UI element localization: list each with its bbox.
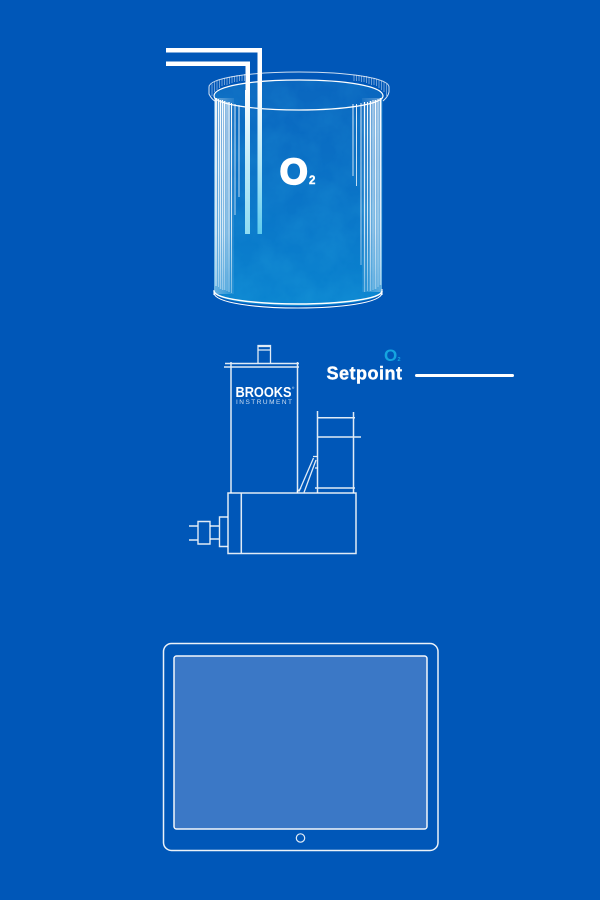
tablet screen (174, 656, 427, 829)
mass flow controller drawing (189, 346, 361, 554)
water texture (214, 80, 383, 306)
O2 small icon: O (384, 346, 397, 365)
brand logo: INSTRUMENT (236, 399, 292, 406)
tablet (164, 644, 438, 850)
outer pipe (166, 48, 262, 90)
O2 label in tank: 2 (309, 175, 315, 187)
tablet body (164, 644, 438, 850)
tank rim (209, 72, 389, 110)
left fitting (189, 522, 210, 544)
brand logo: BROOKS (236, 385, 292, 401)
tank left wall stripes (216, 98, 239, 293)
top stub (258, 346, 270, 363)
tank (209, 72, 389, 308)
setpoint line (416, 374, 512, 377)
tank right wall glow (362, 98, 382, 292)
tank left wall glow (214, 98, 234, 294)
setpoint text: Setpoint (326, 364, 402, 384)
O2 small icon: 2 (398, 357, 401, 363)
tank right wall stripes (353, 98, 380, 292)
tank water body (214, 80, 383, 306)
main housing (224, 362, 299, 493)
tablet home button (296, 834, 305, 842)
O2 label in tank: O (280, 151, 308, 192)
base block (228, 493, 356, 554)
tank base (214, 289, 382, 308)
gas pipes (166, 48, 262, 234)
left flange (210, 517, 228, 546)
right module (315, 411, 361, 493)
slanted bracket (297, 456, 318, 492)
brand logo: ® (292, 386, 295, 390)
inner pipe (166, 62, 250, 90)
setpoint label (326, 346, 402, 384)
